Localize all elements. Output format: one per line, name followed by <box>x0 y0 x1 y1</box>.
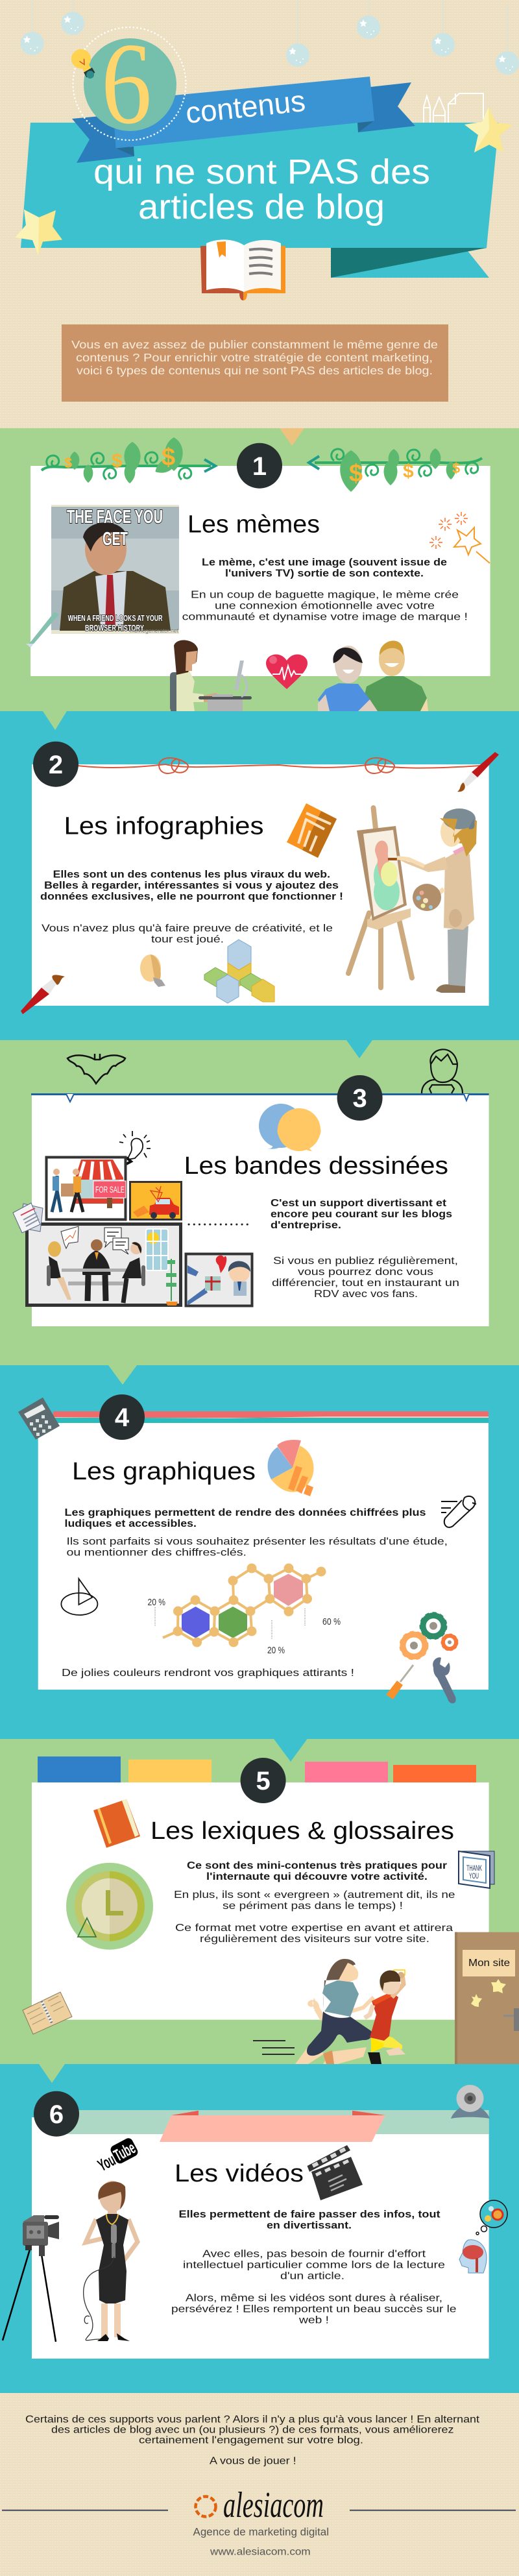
icon: bulb <box>140 954 165 987</box>
text block: Belles à regarder, intéressantes si vous y ajoutez des <box>44 881 339 892</box>
number badge 6: 6 <box>49 2100 64 2129</box>
panel: section 6 les videos <box>3 2064 507 2359</box>
icon: ruler <box>26 612 59 648</box>
icon: sundial clock <box>61 1579 97 1615</box>
right vine <box>309 448 482 492</box>
illustration: runners <box>295 1959 405 2064</box>
title line 2: articles de blog <box>138 188 385 226</box>
text block: se périment pas dans le temps) ! <box>223 1901 403 1912</box>
meme image <box>51 505 179 634</box>
number badge 1: 1 <box>252 452 267 481</box>
text block: d'entreprise. <box>271 1220 341 1231</box>
panel: footer <box>2 2414 516 2558</box>
molecule chart: 20 % <box>148 1597 165 1608</box>
text block: C'est un support divertissant et <box>271 1198 447 1209</box>
text block: Ce sont des mini-contenus très pratiques pour <box>187 1860 447 1871</box>
icon: youtube logo: Tube <box>110 2138 139 2165</box>
number badge 5: 5 <box>256 1767 271 1795</box>
background: section 5 green <box>0 1739 519 2064</box>
text block: Vous n'avez plus qu'à faire preuve de créativité, et le <box>42 923 333 934</box>
right vine: $ <box>403 461 414 482</box>
illustration: woman at computer <box>170 640 252 711</box>
background: section 6 blue <box>0 2064 519 2393</box>
icon: calculator <box>18 1398 60 1440</box>
text block: Elles sont un des contenus les plus viraux du web. <box>53 869 330 881</box>
door <box>455 1932 519 2064</box>
arrow triangle <box>108 1365 137 1385</box>
panel: header <box>15 0 519 402</box>
number badge 3 <box>337 1075 383 1121</box>
heading: Les mèmes <box>187 511 320 539</box>
icon: clapperboard <box>308 2145 363 2200</box>
icon: paint brush top right <box>457 752 499 792</box>
number badge 2 <box>33 742 78 787</box>
text block: l'univers TV) sortie de son contexte. <box>225 568 424 579</box>
number badge 5 <box>241 1758 286 1803</box>
text block: Alors, même si les vidéos sont dures à réaliser, <box>186 2293 442 2304</box>
text block: Ils sont parfaits si vous souhaitez présenter les résultats d'une étude, <box>66 1537 448 1547</box>
white card <box>32 1782 489 2020</box>
closing sentence: De jolies couleurs rendront vos graphiques attirants ! <box>62 1668 354 1679</box>
background: section 2 blue <box>0 711 519 1040</box>
left vine <box>42 437 215 483</box>
text block: En plus, ils sont « evergreen » (autrement dit, ils ne <box>174 1889 455 1901</box>
white card <box>32 1095 489 1326</box>
icon: light bulb <box>68 45 101 83</box>
text block: tour est joué. <box>151 934 224 945</box>
text block: persévérez ! Elles remportent un beau succès sur le <box>171 2304 457 2315</box>
illustration: video camera <box>3 2215 59 2342</box>
icon: blocks <box>204 940 274 1003</box>
text block: une connexion émotionnelle avec votre <box>215 601 435 612</box>
icon: bat <box>67 1054 125 1084</box>
text block: web ! <box>298 2315 329 2326</box>
background: section 3 green <box>0 1040 519 1365</box>
icon: open book <box>200 239 285 300</box>
icon: webcam <box>451 2085 490 2119</box>
icon: pie chart <box>268 1440 314 1496</box>
number badge 6 <box>34 2091 79 2137</box>
text block: données exclusives, elle ne pourront que fonctionner ! <box>40 892 343 903</box>
left vine: $ <box>64 455 72 471</box>
icon: newspaper <box>13 1203 43 1233</box>
comic frame: car <box>130 1182 182 1220</box>
text block <box>174 1860 455 1945</box>
text block: différencier, tout en instaurant un <box>272 1278 459 1289</box>
closing text: Certains de ces supports vous parlent ? Alors il n'y a plus qu'à vous lancer ! En alternant <box>25 2414 480 2425</box>
text block: encore peu courant sur les blogs <box>271 1209 452 1220</box>
text block: RDV avec vos fans. <box>314 1289 418 1300</box>
meme image: memegenerator.net <box>130 627 178 634</box>
text block: vous pourrez donc vous <box>298 1267 433 1278</box>
panel: section 5 les lexiques et glossaires <box>23 1739 519 2064</box>
intro box <box>62 324 448 402</box>
white card <box>38 1423 489 1690</box>
right vine: $ <box>349 460 363 487</box>
speed lines <box>253 2041 295 2054</box>
text block: en divertissant. <box>267 2220 352 2231</box>
icon: thank you card <box>459 1851 494 1888</box>
main teal banner <box>21 123 499 278</box>
heading: Les bandes dessinées <box>184 1152 448 1180</box>
icon: person outline <box>422 1049 463 1093</box>
heading: Les lexiques & glossaires <box>151 1817 454 1845</box>
intro box: contenus ? Pour enrichir votre stratégie de content marketing, <box>76 351 433 364</box>
text block <box>40 869 343 945</box>
icon: thank you card: YOU <box>469 1871 479 1880</box>
text block <box>271 1198 459 1300</box>
left vine: $ <box>112 450 123 472</box>
panel: section 3 les bandes dessinees <box>13 1040 489 1326</box>
text block: Ce format met votre expertise en avant et attirera <box>175 1923 453 1934</box>
comic frame: shop: FOR SALE <box>95 1184 125 1195</box>
icon: notebook <box>23 1992 72 2034</box>
number badge 3: 3 <box>352 1084 367 1113</box>
icon: youtube logo <box>93 2137 140 2175</box>
illustration: reporter woman <box>84 2181 138 2341</box>
closing text <box>25 2414 480 2467</box>
number badge 4: 4 <box>115 1403 130 1432</box>
text block: l'internaute qui découvre votre activité. <box>206 1871 428 1882</box>
icon: gears and tools <box>386 1614 457 1703</box>
text block: Avec elles, pas besoin de fournir d'effort <box>202 2249 426 2260</box>
heading: Les infographies <box>64 813 263 840</box>
background: beige footer <box>0 2393 519 2576</box>
heading: Les graphiques <box>72 1458 256 1485</box>
badge circle <box>73 27 186 140</box>
white card <box>30 466 490 676</box>
logo ring <box>196 2497 215 2516</box>
icon: orange report <box>287 803 337 858</box>
arrow triangle <box>39 2064 65 2083</box>
text block <box>182 557 468 623</box>
number badge 1 <box>237 443 282 489</box>
logo wordmark: alesiacom <box>223 2485 324 2525</box>
molecule chart <box>148 1564 341 1656</box>
colored tabs <box>38 1756 476 1782</box>
intro box: voici 6 types de contenus qui ne sont PAS des articles de blog. <box>77 364 433 377</box>
white card <box>32 764 489 1006</box>
comic frame: meeting <box>27 1224 180 1306</box>
text block: Si vous en publiez régulièrement, <box>273 1256 458 1267</box>
panel: section 4 les graphiques <box>18 1365 489 1703</box>
heading: Les vidéos <box>175 2160 304 2187</box>
icon: paint brush bottom left <box>21 975 65 1014</box>
title line 1: qui ne sont PAS des <box>93 152 430 191</box>
icon: idea bulb outline <box>119 1131 151 1166</box>
illustration: painter <box>388 808 477 993</box>
text block <box>171 2209 457 2326</box>
meme image: BROWSER HISTORY <box>85 623 144 633</box>
text block: communauté et dynamise votre image de marque ! <box>182 612 468 623</box>
right vine: $ <box>452 460 460 476</box>
word contenus: contenus <box>184 84 307 130</box>
icon: star right <box>465 107 513 152</box>
number badge 2: 2 <box>49 751 63 779</box>
icon: clock <box>66 1863 153 1950</box>
mint band <box>62 2110 489 2134</box>
icon: speech bubbles <box>259 1104 320 1151</box>
intro box: Vous en avez assez de publier constamment le même genre de <box>71 338 438 351</box>
background: beige header <box>0 0 519 428</box>
website: www.alesiacom.com <box>210 2547 311 2558</box>
big number 6: 6 <box>101 19 152 148</box>
icon: star left <box>15 210 62 256</box>
illustration: easel <box>348 808 412 988</box>
icon: orange book <box>93 1799 140 1848</box>
arrow triangle <box>43 711 67 730</box>
panel: section 2 les infographies <box>21 711 499 1014</box>
meme image: THE FACE YOU <box>67 507 163 528</box>
icon: heart <box>266 654 308 689</box>
text block: En un coup de baguette magique, le mème crée <box>191 590 459 601</box>
blue ribbon <box>72 77 415 163</box>
icon: magic wand star <box>429 512 490 563</box>
hanging baubles <box>21 0 519 75</box>
meme image: WHEN A FRIEND LOOKS AT YOUR <box>68 613 163 623</box>
molecule chart: 60 % <box>322 1616 341 1627</box>
red string with bows <box>78 758 480 773</box>
comic frame: gift <box>186 1254 252 1306</box>
icon: diploma roll <box>441 1496 476 1527</box>
illustration: couple <box>318 640 428 711</box>
divider lines <box>2 2510 516 2511</box>
text block: régulièrement des visiteurs sur votre site. <box>200 1934 429 1945</box>
left vine: $ <box>162 444 175 471</box>
meme image: GET <box>103 529 128 550</box>
text block: Elles permettent de faire passer des infos, tout <box>179 2209 441 2220</box>
closing text: A vous de jouer ! <box>210 2456 296 2467</box>
white card <box>32 2117 489 2359</box>
icon: thank you card: THANK <box>466 1864 482 1873</box>
text block: d'un article. <box>280 2271 344 2282</box>
panel: section 1 les memes <box>26 428 490 730</box>
arrow triangle <box>274 1739 308 1762</box>
dotted connector <box>189 1224 252 1225</box>
closing text: certainement l'engagement sur votre blog. <box>139 2435 363 2446</box>
number badge 4 <box>99 1394 145 1440</box>
colored band <box>53 1411 489 1423</box>
comic frame: shop <box>47 1158 126 1220</box>
arrow triangle <box>346 1040 372 1058</box>
molecule chart: 20 % <box>267 1645 285 1656</box>
arrow triangle <box>280 428 304 446</box>
text block: Les graphiques permettent de rendre des données chiffrées plus <box>65 1507 426 1518</box>
text block: ludiques et accessibles. <box>65 1518 197 1529</box>
icon: pen and paper outline <box>424 93 483 123</box>
text block: Le mème, c'est une image (souvent issue de <box>202 557 447 568</box>
closing text: des articles de blog avec un (ou plusieurs ?) de ces formats, vous améliorerez <box>51 2425 454 2436</box>
door: Mon site <box>468 1958 510 1969</box>
icon: youtube logo: You <box>95 2150 119 2175</box>
salmon ribbon <box>160 2111 385 2142</box>
text block <box>65 1507 448 1559</box>
tagline: Agence de marketing digital <box>193 2526 329 2538</box>
background: section 4 blue <box>0 1365 519 1739</box>
background: section 1 green <box>0 428 519 711</box>
text block: intellectuel particulier comme lors de la lecture <box>183 2260 445 2271</box>
text block: ou mentionner des chiffres-clés. <box>66 1548 247 1559</box>
blue rule with notches <box>31 1093 489 1102</box>
icon: thinking head <box>459 2200 507 2273</box>
arrow triangle to next section <box>43 711 67 730</box>
